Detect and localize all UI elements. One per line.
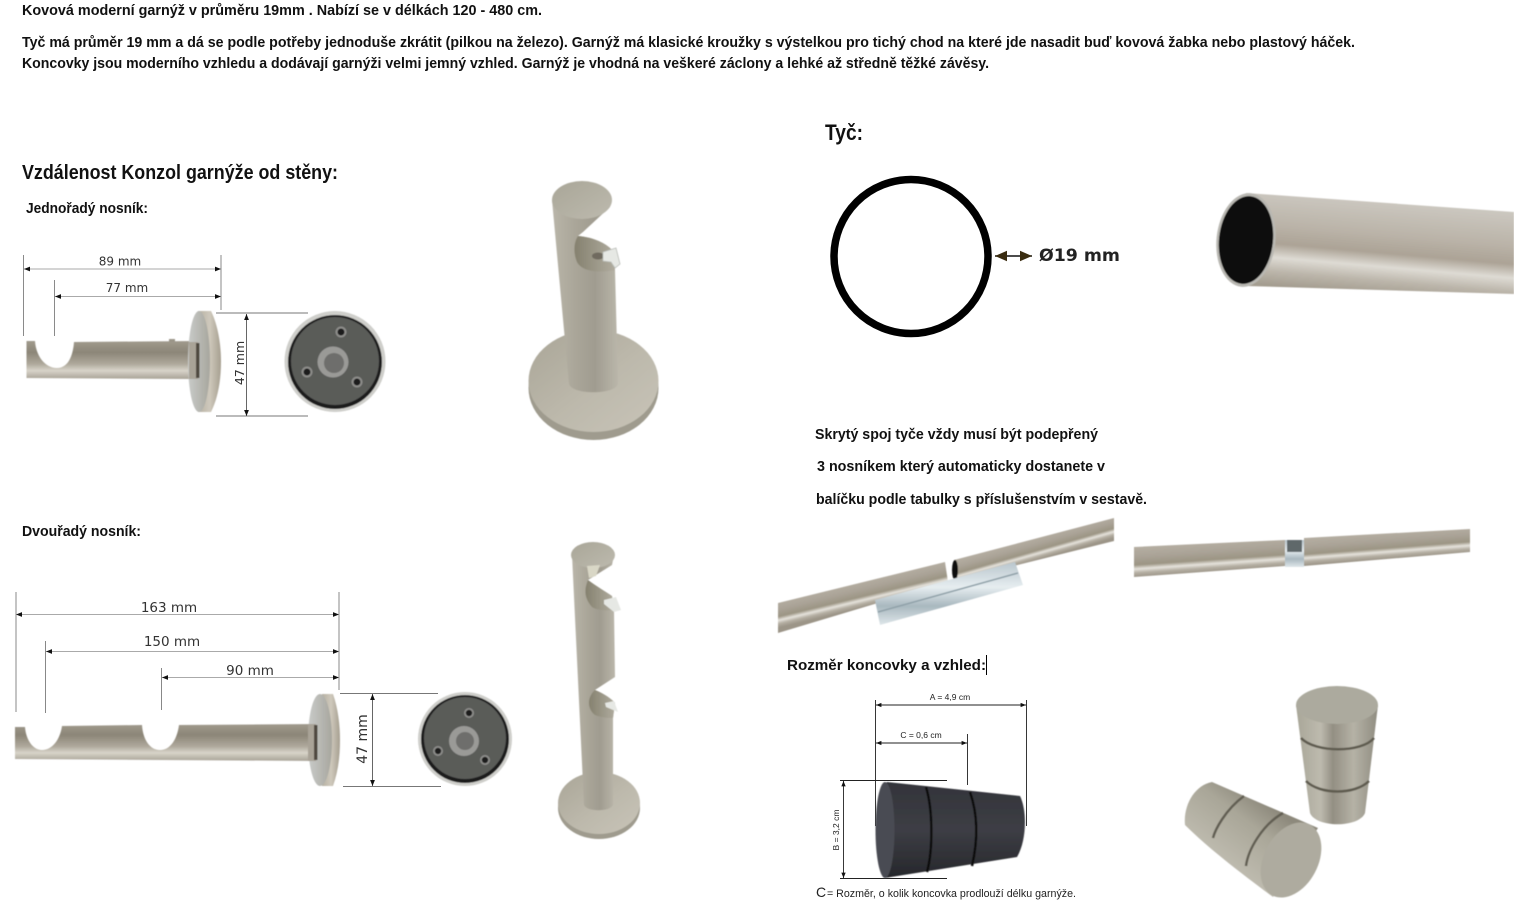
photo: rod joint assembled bbox=[1134, 529, 1470, 577]
bracket back plate bbox=[418, 692, 512, 786]
heading: end cap dimensions: Rozměr koncovky a vzhled: bbox=[787, 657, 986, 674]
photo: single bracket post bbox=[528, 181, 658, 440]
photo: rod end bbox=[1212, 190, 1514, 294]
heading: rod: Tyč: bbox=[825, 120, 863, 145]
intro line 1: Kovová moderní garnýž v průměru 19mm . Nabízí se v délkách 120 - 480 cm. bbox=[22, 2, 542, 19]
bracket arm side view bbox=[26, 311, 221, 412]
dimension lines bbox=[831, 692, 1026, 878]
bracket back plate bbox=[284, 311, 386, 412]
intro line 2: Tyč má průměr 19 mm a dá se podle potřeby jednoduše zkrátit (pilkou na železo). Garnýž má klasické kroužky s výstelkou pro tichý chod na které jde nasadit buď kovová žabka nebo plastový háček. bbox=[22, 34, 1355, 51]
lying cap bbox=[1185, 782, 1334, 908]
caption: C bbox=[816, 884, 826, 900]
subheading: single bracket: Jednořadý nosník: bbox=[26, 200, 148, 217]
caption: = Rozměr, o kolik koncovka prodlouží délku garnýže. bbox=[827, 888, 1076, 900]
dimension: 47 mm: 47 mm bbox=[355, 714, 371, 764]
dimension lines: 163, 150 and 90 mm: 163 mm bbox=[141, 600, 197, 616]
bracket arm side view bbox=[15, 694, 340, 786]
rod cross-section diagram bbox=[834, 180, 1120, 334]
dimension lines: C = 0,6 cm bbox=[900, 730, 942, 740]
diameter label: Ø19 mm bbox=[1039, 246, 1120, 266]
dimension: 47 mm: 47 mm bbox=[232, 341, 247, 385]
dimension: 47 mm bbox=[340, 694, 441, 786]
photo: rod joint open bbox=[778, 518, 1114, 633]
diameter arrow bbox=[995, 255, 1032, 257]
dimension lines: 163, 150 and 90 mm bbox=[16, 592, 339, 713]
diagram: single bracket bbox=[24, 254, 386, 416]
dimension lines: 89 and 77 mm bbox=[24, 254, 221, 336]
black end cap bbox=[876, 782, 1025, 878]
dimension lines: A = 4,9 cm bbox=[930, 692, 970, 702]
diagram: double bracket bbox=[15, 592, 512, 786]
upright cap bbox=[1296, 686, 1378, 824]
heading: bracket distance: Vzdálenost Konzol garnýže od stěny: bbox=[22, 162, 338, 184]
intro line 3: Koncovky jsou moderního vzhledu a dodávají garnýži velmi jemný vzhled. Garnýž je vhodná na veškeré záclony a lehké až středně těžké závěsy. bbox=[22, 55, 989, 72]
note line 3: balíčku podle tabulky s příslušenstvím v sestavě. bbox=[816, 491, 1147, 508]
dimension lines: 163, 150 and 90 mm: 150 mm bbox=[144, 634, 200, 650]
note line 2: 3 nosníkem který automaticky dostanete v bbox=[817, 458, 1106, 475]
ring bbox=[834, 180, 988, 334]
intro text bbox=[22, 2, 1355, 72]
photo: double bracket post bbox=[558, 542, 640, 839]
dimension: 47 mm bbox=[216, 313, 308, 416]
dimension lines: 89 and 77 mm: 77 mm bbox=[106, 281, 148, 295]
dimension lines: 163, 150 and 90 mm: 90 mm bbox=[226, 663, 274, 679]
diagram: end cap dimensions bbox=[816, 692, 1076, 900]
photo: metal end caps bbox=[1185, 686, 1378, 908]
subheading: double bracket: Dvouřadý nosník: bbox=[22, 523, 141, 540]
dimension lines: B = 3,2 cm bbox=[831, 810, 841, 850]
text: hidden joint note bbox=[815, 426, 1147, 508]
note line 1: Skrytý spoj tyče vždy musí být podepřený bbox=[815, 426, 1099, 443]
dimension lines: 89 and 77 mm: 89 mm bbox=[99, 254, 141, 268]
